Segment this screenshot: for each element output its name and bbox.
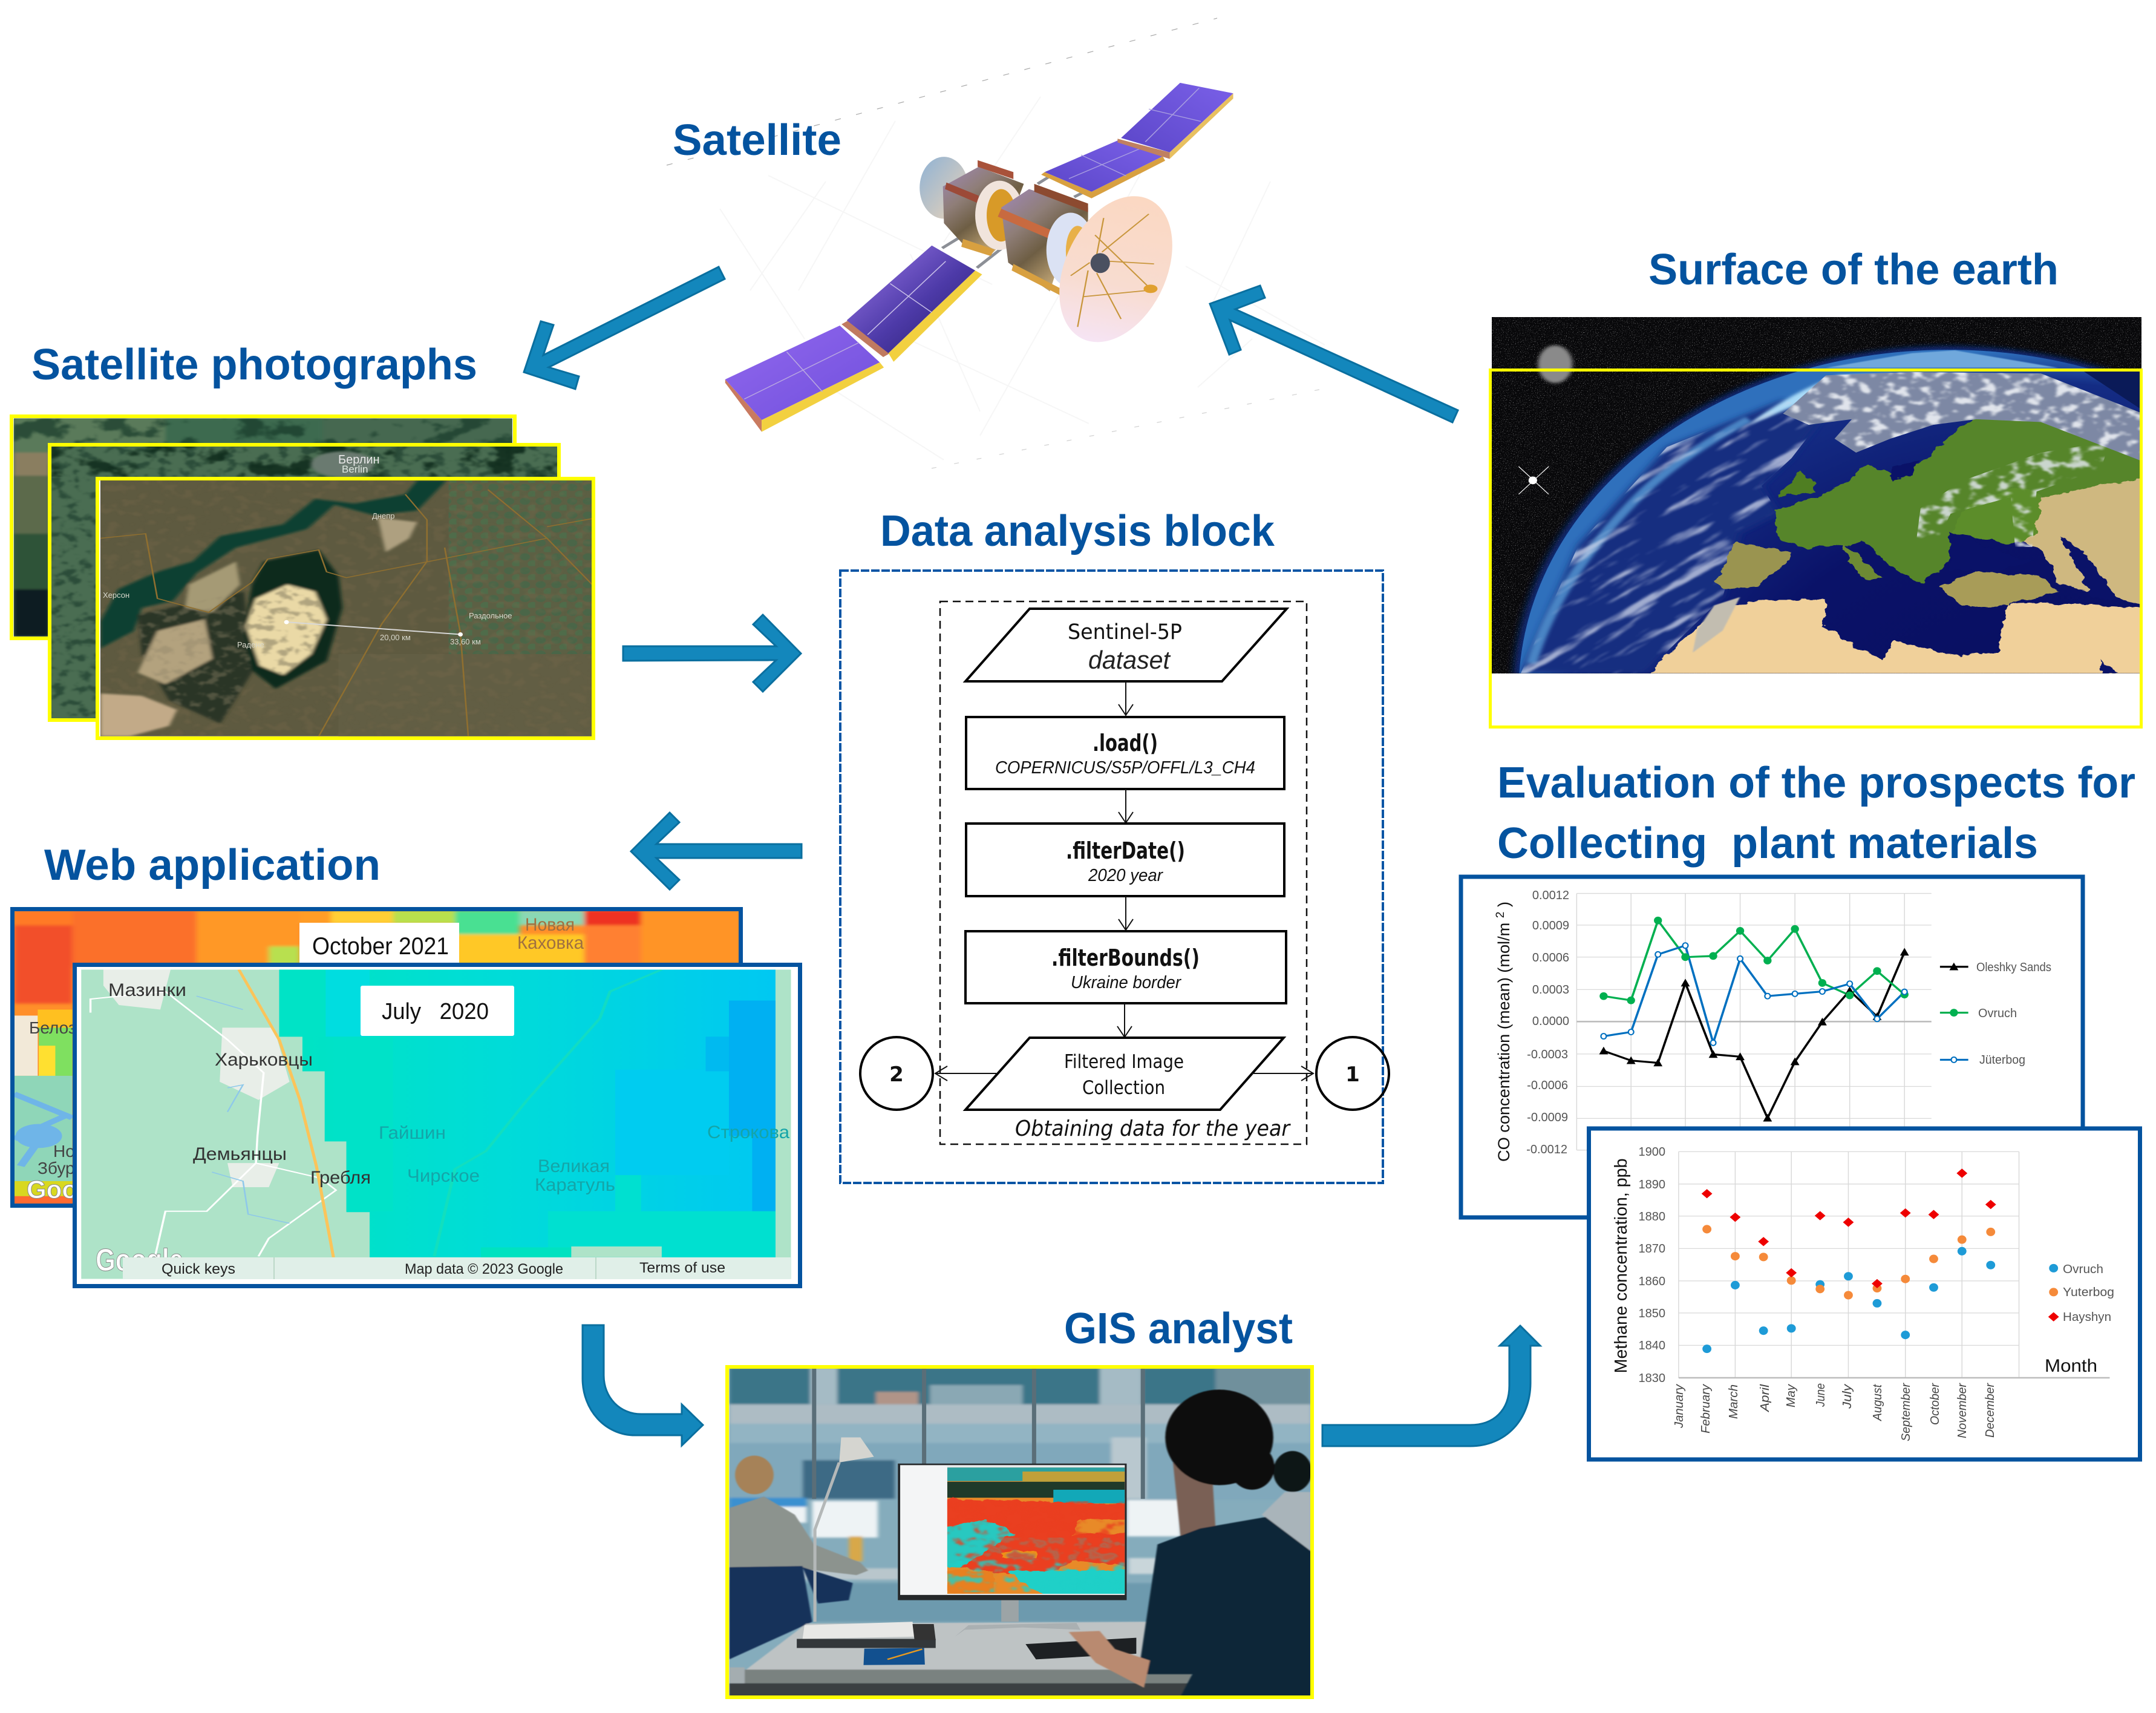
month labels: July <box>1841 1384 1854 1409</box>
y axis title: Methane concentration, ppb <box>1612 1158 1631 1374</box>
photo: back satellite image <box>11 416 515 638</box>
flow node: Sentinel-5P dataset <box>965 609 1287 681</box>
date box: October 2021: October 2021 <box>312 933 449 960</box>
flow node: filterDate: 2020 year <box>1088 866 1163 885</box>
labels: partially hidden towns: Белоз <box>29 1018 76 1037</box>
legend: Jüterbog <box>1979 1053 2025 1067</box>
arrow: GIS analyst to evaluation <box>1322 1326 1540 1446</box>
caption: Obtaining data for the year: Obtaining data for the year <box>1015 1116 1291 1141</box>
panel: CO concentration chart <box>1461 877 2083 1217</box>
flow node: Sentinel-5P dataset: Sentinel-5P <box>1068 620 1182 644</box>
arrow: earth to satellite <box>1210 286 1458 422</box>
flow node: load: .load() <box>1093 730 1158 756</box>
x axis title: Month <box>2045 1356 2097 1376</box>
labels: partially hidden towns <box>29 1018 76 1177</box>
y axis title: CO concentration (mean) (mol/m <box>1495 924 1513 1162</box>
heading: Satellite photographs: Satellite photographs <box>31 341 477 389</box>
date box: July 2020: July 2020 <box>382 999 489 1024</box>
heading: Surface of the earth: Surface of the earth <box>1648 246 2059 294</box>
chart: CO lines <box>1576 894 1968 1150</box>
map footer: Quick keys <box>162 1261 235 1277</box>
map labels on satellite image: 33,60 км <box>450 637 481 646</box>
y axis tick labels: 1830 <box>1638 1372 1665 1385</box>
legend: Ovruch <box>1978 1007 2017 1020</box>
map: October 2021 <box>12 909 740 1205</box>
dashed frame: Obtaining data <box>940 601 1307 1144</box>
month labels: January <box>1673 1384 1686 1429</box>
map labels on satellite image: Радене <box>237 640 264 649</box>
map labels on satellite image: Раздольное <box>469 611 512 620</box>
map footer: Map data © 2023 Google <box>405 1261 563 1277</box>
arrow: to node 2 <box>935 1066 996 1081</box>
y axis tick labels <box>1638 1145 1665 1385</box>
y axis tick labels: 1880 <box>1638 1210 1665 1223</box>
y axis tick labels: 0.0003 <box>1532 983 1569 997</box>
legend <box>2063 1263 2114 1324</box>
label: Berlin Cyrillic: Берлин <box>338 453 380 467</box>
connector circle 1 <box>1316 1037 1389 1110</box>
labels: map towns: Строкова <box>707 1122 789 1142</box>
panel: Methane concentration chart <box>1589 1128 2140 1459</box>
flow node: filterDate: .filterDate() <box>1066 837 1185 864</box>
y axis tick labels: 1870 <box>1638 1242 1665 1256</box>
photo: middle satellite image <box>50 445 559 720</box>
arrow: to filterBounds <box>1119 896 1133 930</box>
connector circle 2 <box>860 1037 933 1110</box>
panel: web application maps <box>12 909 800 1286</box>
legend: Hayshyn <box>2063 1311 2111 1324</box>
heading: Evaluation of the prospects: Collecting plant materials <box>1497 819 2038 868</box>
flow node: filterBounds: Ukraine border <box>1071 973 1181 992</box>
month labels: September <box>1900 1383 1913 1441</box>
labels: map towns: Великая <box>538 1156 610 1176</box>
heading: Evaluation of the prospects: Evaluation of the prospects for <box>1497 759 2135 807</box>
y axis tick labels: 1890 <box>1638 1178 1665 1191</box>
legend: Ovruch <box>2063 1263 2103 1276</box>
month labels: August <box>1871 1384 1884 1421</box>
labels: map towns: Демьянцы <box>193 1144 287 1164</box>
flow node: filterBounds <box>965 931 1286 1003</box>
map labels on satellite image: Днепр <box>372 511 394 520</box>
connector circle 2: 2 <box>889 1063 904 1087</box>
month labels <box>1673 1383 1997 1441</box>
chart: methane scatter <box>1679 1151 2109 1378</box>
icon: satellite <box>725 83 1233 432</box>
y axis tick labels: -0.0003 <box>1527 1048 1568 1061</box>
labels: map towns: Мазинки <box>108 980 186 1000</box>
y axis tick labels: -0.0006 <box>1527 1079 1568 1092</box>
flow node: filterBounds: .filterBounds() <box>1051 945 1200 971</box>
panel: data analysis block <box>840 571 1389 1183</box>
heading: Data analysis block: Data analysis block <box>880 507 1275 555</box>
labels: map towns: Чирское <box>407 1166 480 1186</box>
map labels on satellite image <box>103 511 512 649</box>
date box: July 2020 <box>361 986 514 1036</box>
flow node: Filtered Image Collection: Collection <box>1082 1077 1165 1099</box>
month labels: October <box>1929 1383 1942 1425</box>
arrow: photographs to data analysis <box>623 615 801 692</box>
labels: map towns: Каратуль <box>535 1175 615 1195</box>
month labels: February <box>1699 1384 1713 1433</box>
faint watermark lines behind satellite <box>667 18 1331 468</box>
photo: Oleshky Sands satellite image <box>97 479 593 738</box>
y axis tick labels: 1850 <box>1638 1307 1665 1320</box>
arrow: to filtered collection <box>1117 1003 1132 1037</box>
label: Kakhovka: Каховка <box>517 933 584 953</box>
heading: GIS analyst: GIS analyst <box>1064 1305 1293 1353</box>
map: July 2020 <box>75 965 800 1286</box>
flow node: load <box>966 717 1284 789</box>
map labels on satellite image: 20,00 км <box>380 633 411 642</box>
y axis tick labels: 0.0000 <box>1532 1015 1569 1028</box>
y axis title: ) <box>1495 902 1513 912</box>
arrow: web application to GIS analyst <box>583 1325 703 1446</box>
y axis tick labels: 1860 <box>1638 1275 1665 1288</box>
flow node: Filtered Image Collection: Filtered Image <box>1064 1051 1184 1073</box>
flow node: Filtered Image Collection <box>965 1038 1284 1110</box>
y axis tick labels: 1900 <box>1638 1145 1665 1159</box>
arrow: to filterDate <box>1119 789 1133 823</box>
y axis tick labels: -0.0009 <box>1527 1111 1568 1124</box>
legend: Yuterbog <box>2063 1286 2114 1299</box>
date box: October 2021 <box>299 923 459 965</box>
legend: Oleshky Sands <box>1976 961 2051 974</box>
flow node: filterDate <box>966 824 1284 896</box>
labels: map towns: Харьковцы <box>215 1050 313 1070</box>
panel: satellite photographs <box>11 416 593 738</box>
y axis tick labels: 1840 <box>1638 1339 1665 1352</box>
labels: map towns: Гребля <box>310 1168 371 1188</box>
connector circle 1: 1 <box>1345 1063 1360 1087</box>
month labels: December <box>1984 1383 1997 1438</box>
label: Nova Kakhovka: Новая <box>525 915 575 935</box>
arrow: data analysis to web application <box>631 813 802 889</box>
flow node: Sentinel-5P dataset: dataset <box>1088 646 1171 674</box>
flow node: load: COPERNICUS/S5P/OFFL/L3_CH4 <box>995 758 1255 778</box>
arrow: satellite to photographs <box>524 267 725 389</box>
y axis title: 2 <box>1494 912 1507 918</box>
month labels: June <box>1814 1383 1828 1407</box>
month labels: November <box>1956 1383 1969 1438</box>
heading: Evaluation of the prospects <box>1497 759 2135 868</box>
arrow: to load <box>1119 681 1133 715</box>
label: Google front: Google <box>96 1243 183 1278</box>
heading: Satellite: Satellite <box>673 116 841 165</box>
y axis tick labels: 0.0006 <box>1532 951 1569 965</box>
arrow: to node 1 <box>1252 1066 1313 1081</box>
month labels: March <box>1727 1384 1740 1419</box>
map footer <box>123 1257 791 1279</box>
label: Berlin Latin: Berlin <box>342 463 368 475</box>
labels: partially hidden towns: Но <box>53 1142 75 1161</box>
labels: map towns <box>108 980 789 1195</box>
map labels on satellite image: Херсон <box>103 591 129 600</box>
label: Google back: Goo <box>27 1175 77 1204</box>
labels: map towns: Гайшин <box>379 1123 446 1143</box>
month labels: April <box>1759 1384 1772 1412</box>
y axis tick labels <box>1526 889 1569 1156</box>
y axis tick labels: 0.0009 <box>1532 919 1569 932</box>
photo: GIS analyst <box>727 1367 1312 1697</box>
y axis tick labels: -0.0012 <box>1526 1143 1567 1156</box>
y axis tick labels: 0.0012 <box>1532 889 1569 902</box>
photo: Earth surface <box>1489 317 2143 729</box>
legend <box>1976 961 2051 1067</box>
labels: partially hidden towns: Збур <box>38 1159 75 1177</box>
month labels: May <box>1785 1384 1798 1407</box>
map footer: Terms of use <box>639 1260 725 1276</box>
heading: Web application: Web application <box>44 841 381 889</box>
